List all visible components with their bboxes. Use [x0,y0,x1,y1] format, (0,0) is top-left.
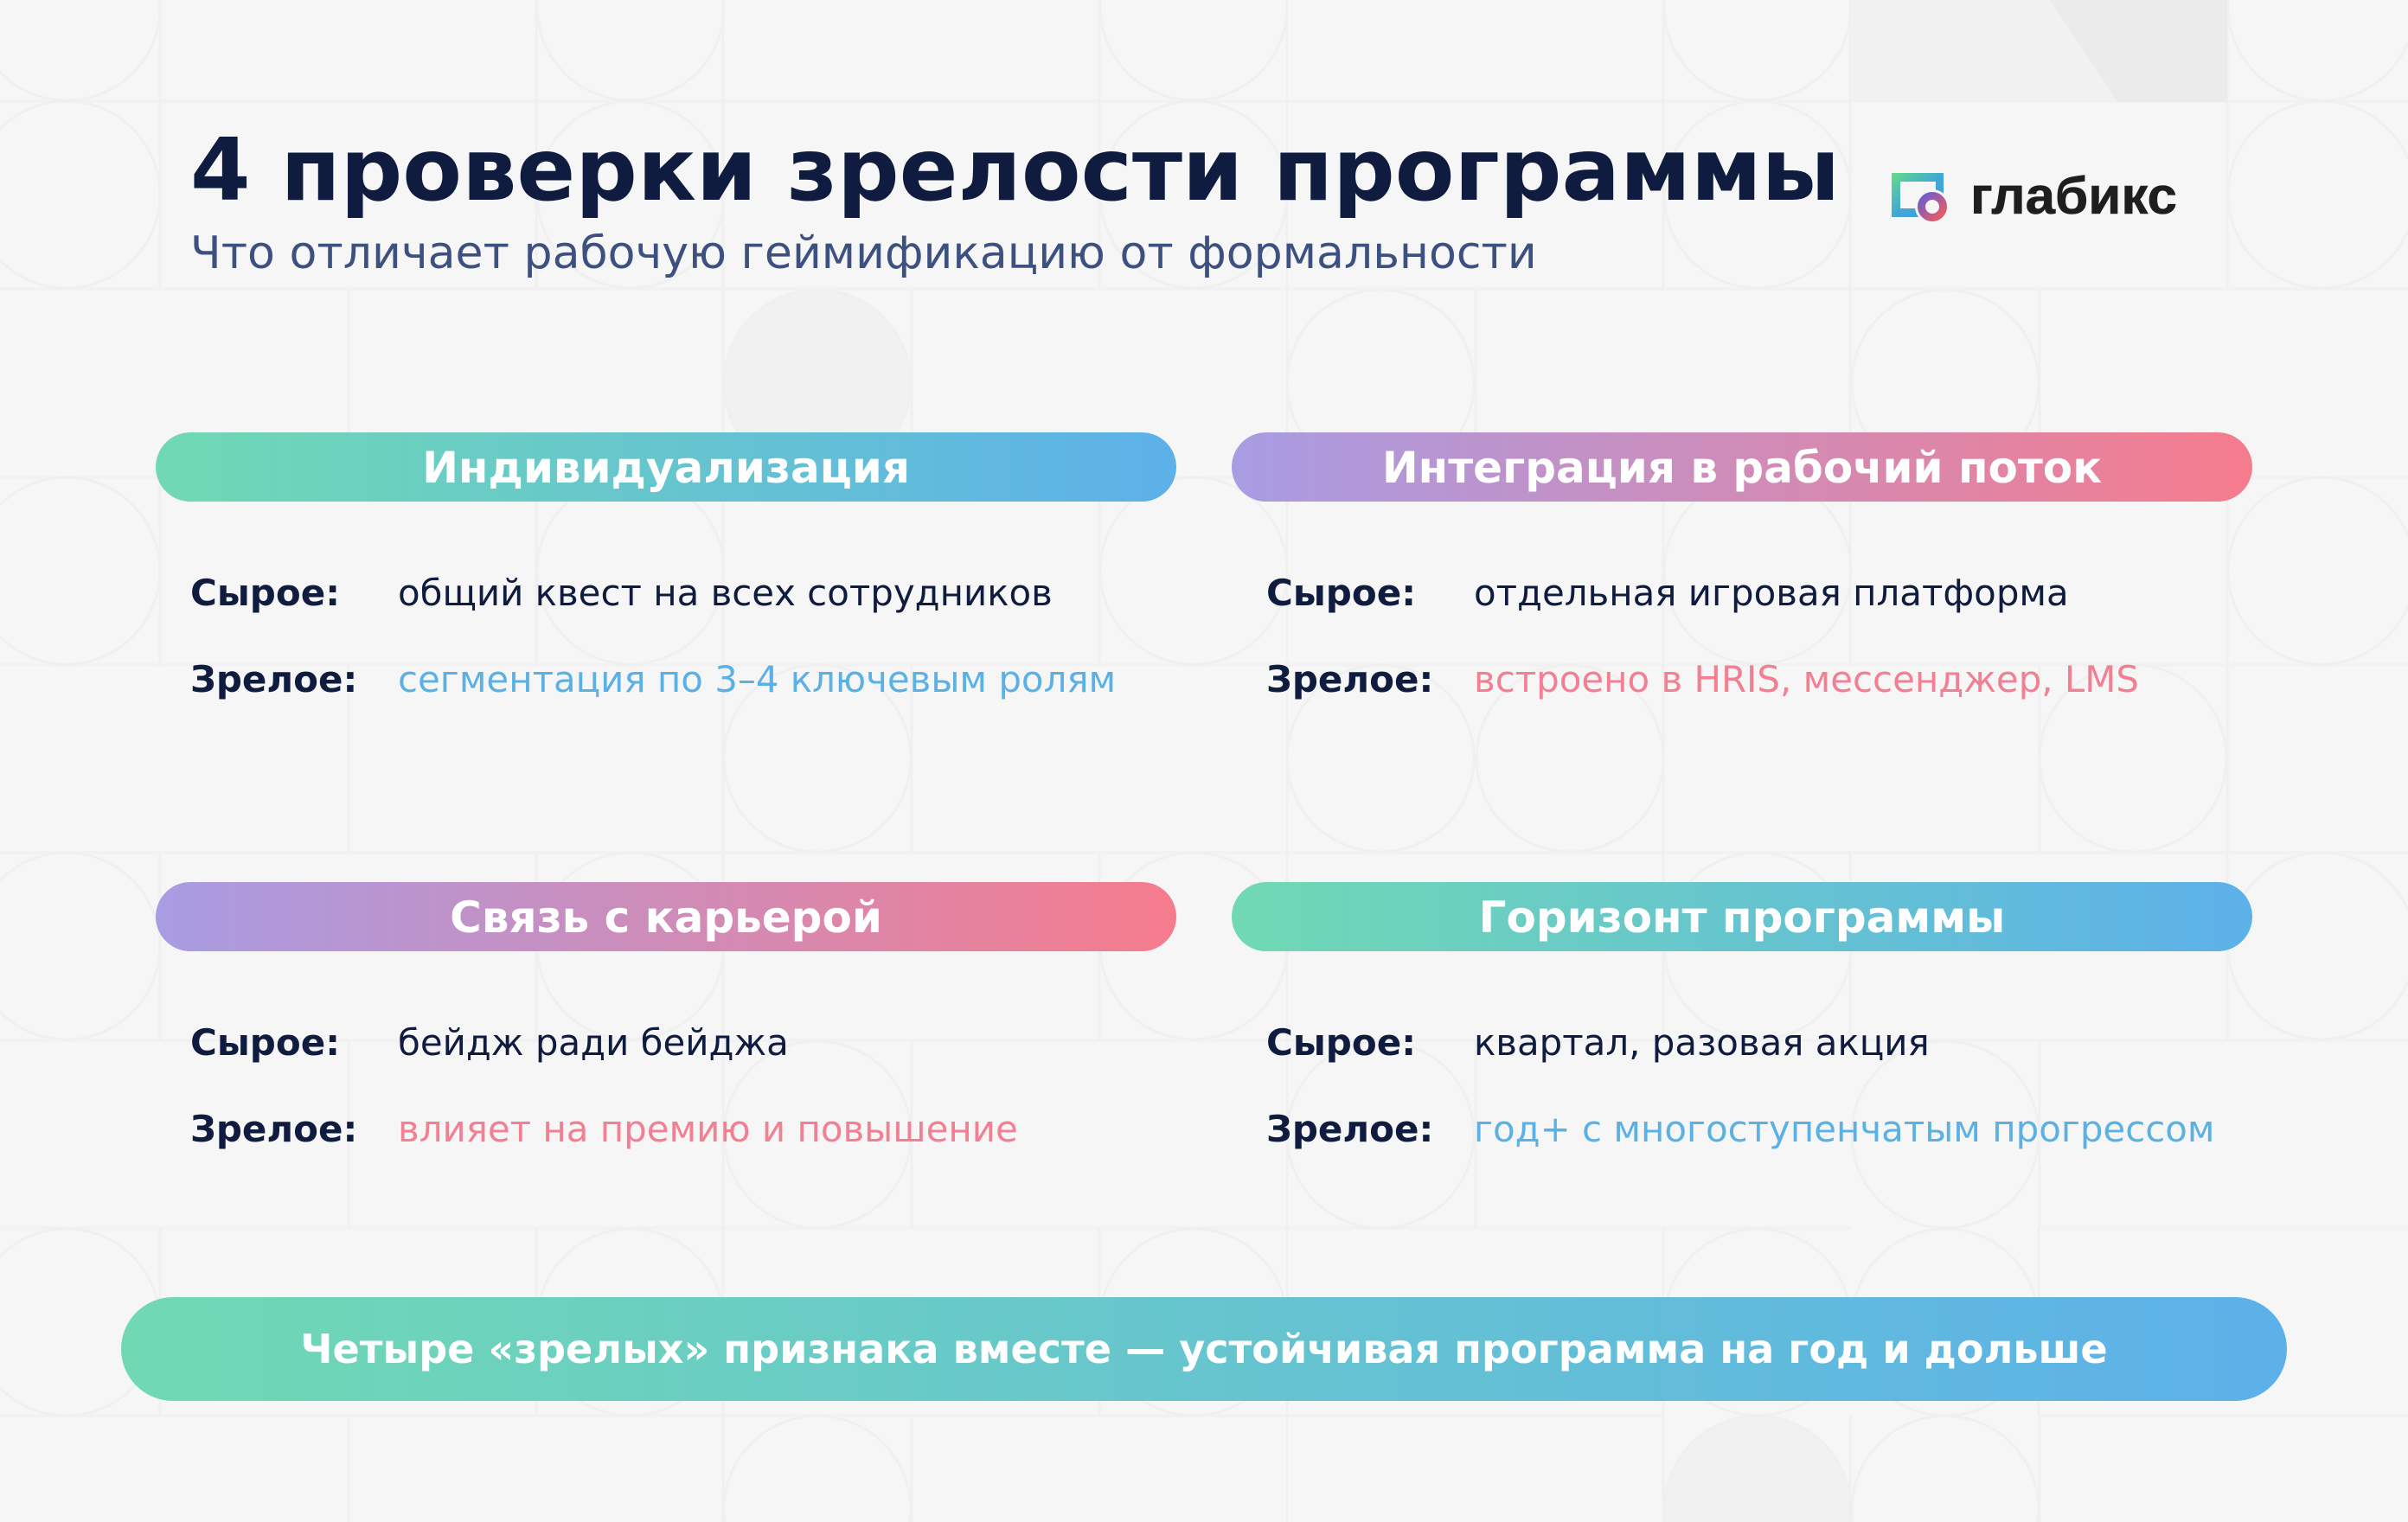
panel: Горизонт программы [1232,882,2252,1150]
row: mature: Зрелое: [190,1108,357,1150]
row: raw: бейдж ради бейджа [398,1021,789,1064]
row: raw: Сырое: [190,1021,340,1064]
panel: Связь с карьерой [156,882,1176,1150]
title: 4 проверки зрелости программы [190,119,1840,221]
icon: logo mark [1892,173,1950,224]
corner decoration [1852,0,2227,287]
row: raw: отдельная игровая платформа [1474,572,2069,614]
footer banner: Четыре «зрелых» признака вместе — устойчивая программа на год и дольше [300,1326,2108,1372]
row: raw: общий квест на всех сотрудников [398,572,1053,614]
row: mature: Зрелое: [190,658,357,700]
row: raw: Сырое: [190,572,340,614]
logo wordmark: глабикс [1970,167,2177,225]
row: mature: влияет на премию и повышение [398,1108,1018,1150]
header pill: Индивидуализация [422,443,910,493]
row: raw: Сырое: [1266,1021,1416,1064]
panel: Интеграция в рабочий поток [1232,432,2252,700]
row: mature: год+ с многоступенчатым прогрессом [1474,1108,2214,1150]
row: mature: встроено в HRIS, мессенджер, LMS [1474,658,2139,700]
row: raw: квартал, разовая акция [1474,1021,1930,1064]
header pill [1232,432,2252,502]
header pill [156,432,1176,502]
header pill: Горизонт программы [1479,892,2005,943]
row: raw [190,1021,789,1064]
subtitle: Что отличает рабочую геймификацию от формальности [190,227,1537,279]
header pill [1232,882,2252,951]
footer banner [121,1297,2287,1401]
header pill: Связь с карьерой [450,892,882,943]
header pill: Интеграция в рабочий поток [1382,443,2102,493]
row: raw: Сырое: [1266,572,1416,614]
row: mature: сегментация по 3–4 ключевым ролям [398,658,1116,700]
row: mature: Зрелое: [1266,1108,1433,1150]
row: mature: Зрелое: [1266,658,1433,700]
panel: Индивидуализация [156,432,1176,700]
logo [1892,167,2177,225]
header pill [156,882,1176,951]
row: raw [1266,1021,1930,1064]
